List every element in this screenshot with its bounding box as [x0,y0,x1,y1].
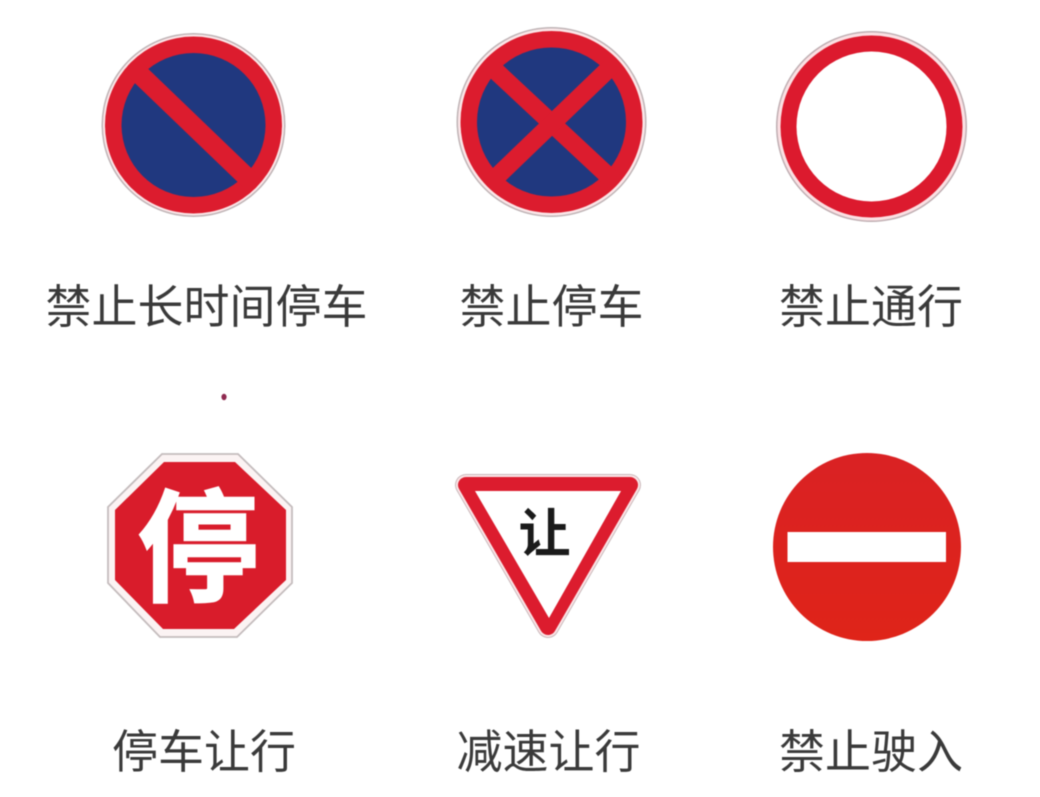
mark: small stray dot [221,394,227,400]
sign: no thoroughfare [776,31,967,222]
sign: no long-time parking [102,33,286,217]
sign: no parking [456,27,646,217]
sign: slow and yield: 让 [518,506,571,564]
sign: stop and yield [108,454,292,637]
caption: no thoroughfare: 禁止通行 [779,281,963,333]
caption: no parking: 禁止停车 [460,281,644,333]
sign: slow and yield [466,485,630,627]
caption: no long-time parking: 禁止长时间停车 [46,281,368,333]
caption: slow and yield: 减速让行 [456,726,640,778]
sign: stop and yield: 停 [137,482,259,618]
sign: no entry [773,453,961,641]
caption: stop and yield: 停车让行 [112,726,296,778]
caption: no entry: 禁止驶入 [779,726,963,778]
